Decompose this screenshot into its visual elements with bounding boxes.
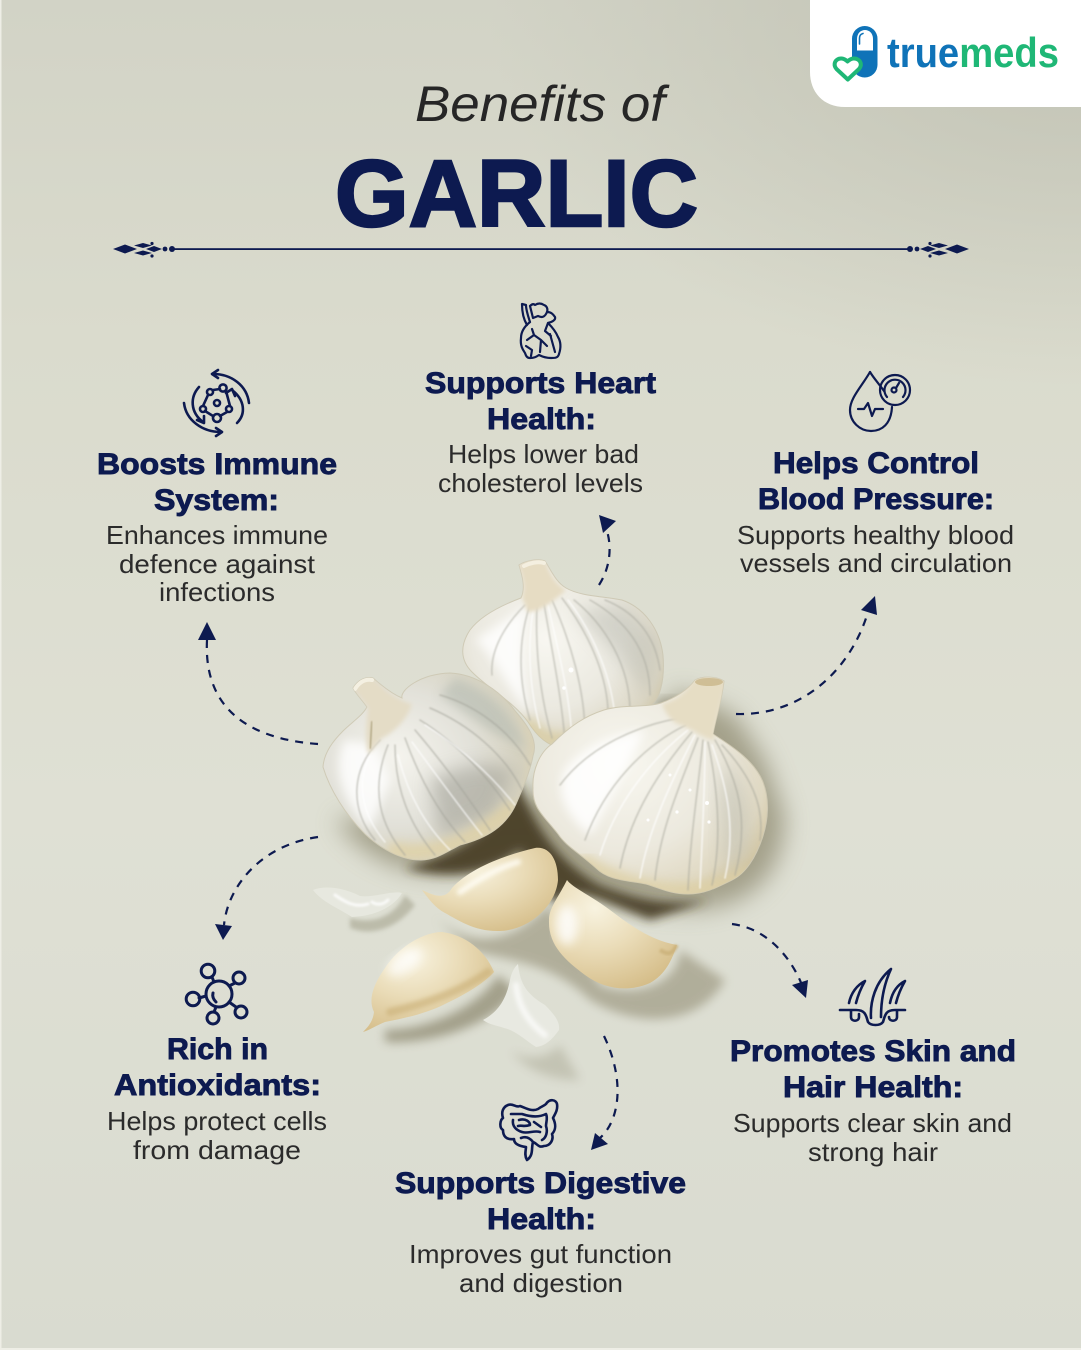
arrow: garlic to heart health [599, 515, 616, 585]
garlic clove: centre [422, 848, 558, 931]
garlic bulb: right [533, 677, 768, 894]
description [733, 1108, 1012, 1167]
heading: Antioxidants: [114, 1069, 321, 1102]
heading [97, 448, 337, 517]
garlic photo illustration [313, 560, 785, 1080]
icon: capsule and heart [835, 26, 878, 80]
panel: supports digestive health [395, 1100, 686, 1298]
description: Helps protect cells [107, 1106, 327, 1136]
garlic clove: right [549, 880, 677, 988]
description: vessels and circulation [740, 548, 1012, 578]
description: Supports clear skin and [733, 1108, 1012, 1138]
icon: blood drop with gauge [850, 372, 910, 431]
logo panel [810, 0, 1081, 107]
heading [395, 1167, 686, 1236]
cast shadows [335, 690, 785, 1080]
garlic clove: bottom [363, 932, 494, 1032]
title: GARLIC: GARLIC [335, 141, 698, 247]
heading: Helps Control [773, 447, 979, 480]
arrow: garlic to blood pressure [736, 596, 877, 714]
logo wordmark: truemeds [887, 29, 1059, 76]
heading [114, 1033, 321, 1102]
ornamental divider [113, 242, 969, 258]
description [106, 520, 328, 607]
description [438, 439, 643, 498]
description: strong hair [808, 1137, 938, 1167]
garlic bulb: back [463, 560, 663, 748]
description: Helps lower bad [448, 439, 639, 469]
heading: Health: [487, 403, 596, 436]
heading: Blood Pressure: [758, 483, 994, 516]
icon: anatomical heart [521, 304, 560, 358]
description: infections [159, 577, 275, 607]
icon: hair follicle [840, 969, 905, 1025]
arrow: garlic to skin and hair [732, 924, 808, 998]
description: defence against [119, 549, 316, 579]
description: cholesterol levels [438, 468, 643, 498]
description: Enhances immune [106, 520, 328, 550]
description: and digestion [459, 1268, 623, 1298]
panel: rich in antioxidants [107, 964, 327, 1165]
description [107, 1106, 327, 1165]
icon: intestines [500, 1100, 557, 1160]
heading: Boosts Immune [97, 448, 337, 481]
heading: System: [154, 484, 279, 517]
description [737, 520, 1014, 578]
heading [730, 1035, 1016, 1104]
title: Benefits of: Benefits of [415, 76, 670, 132]
garlic bulb: left [323, 673, 534, 860]
heading: Promotes Skin and [730, 1035, 1016, 1068]
panel: helps control blood pressure [737, 372, 1014, 578]
heading: Supports Digestive [395, 1167, 686, 1200]
heading: Health: [487, 1203, 596, 1236]
heading: Supports Heart [425, 367, 656, 400]
heading: Hair Health: [783, 1071, 963, 1104]
arrow: garlic to digestive health [591, 1036, 618, 1150]
description [409, 1239, 672, 1298]
panel: promotes skin and hair health [730, 969, 1016, 1167]
description: Supports healthy blood [737, 520, 1014, 550]
panel: boosts immune system [97, 370, 337, 607]
arrow: garlic to immune system [198, 622, 318, 744]
description: from damage [133, 1135, 301, 1165]
garlic skin flakes [313, 888, 559, 1047]
heading [758, 447, 994, 516]
icon: immune cycle [184, 370, 249, 436]
arrow: garlic to antioxidants [215, 837, 318, 940]
heading [425, 367, 656, 436]
icon: molecule [186, 964, 247, 1024]
description: Improves gut function [409, 1239, 672, 1269]
panel: supports heart health [425, 304, 656, 498]
heading: Rich in [167, 1033, 268, 1066]
